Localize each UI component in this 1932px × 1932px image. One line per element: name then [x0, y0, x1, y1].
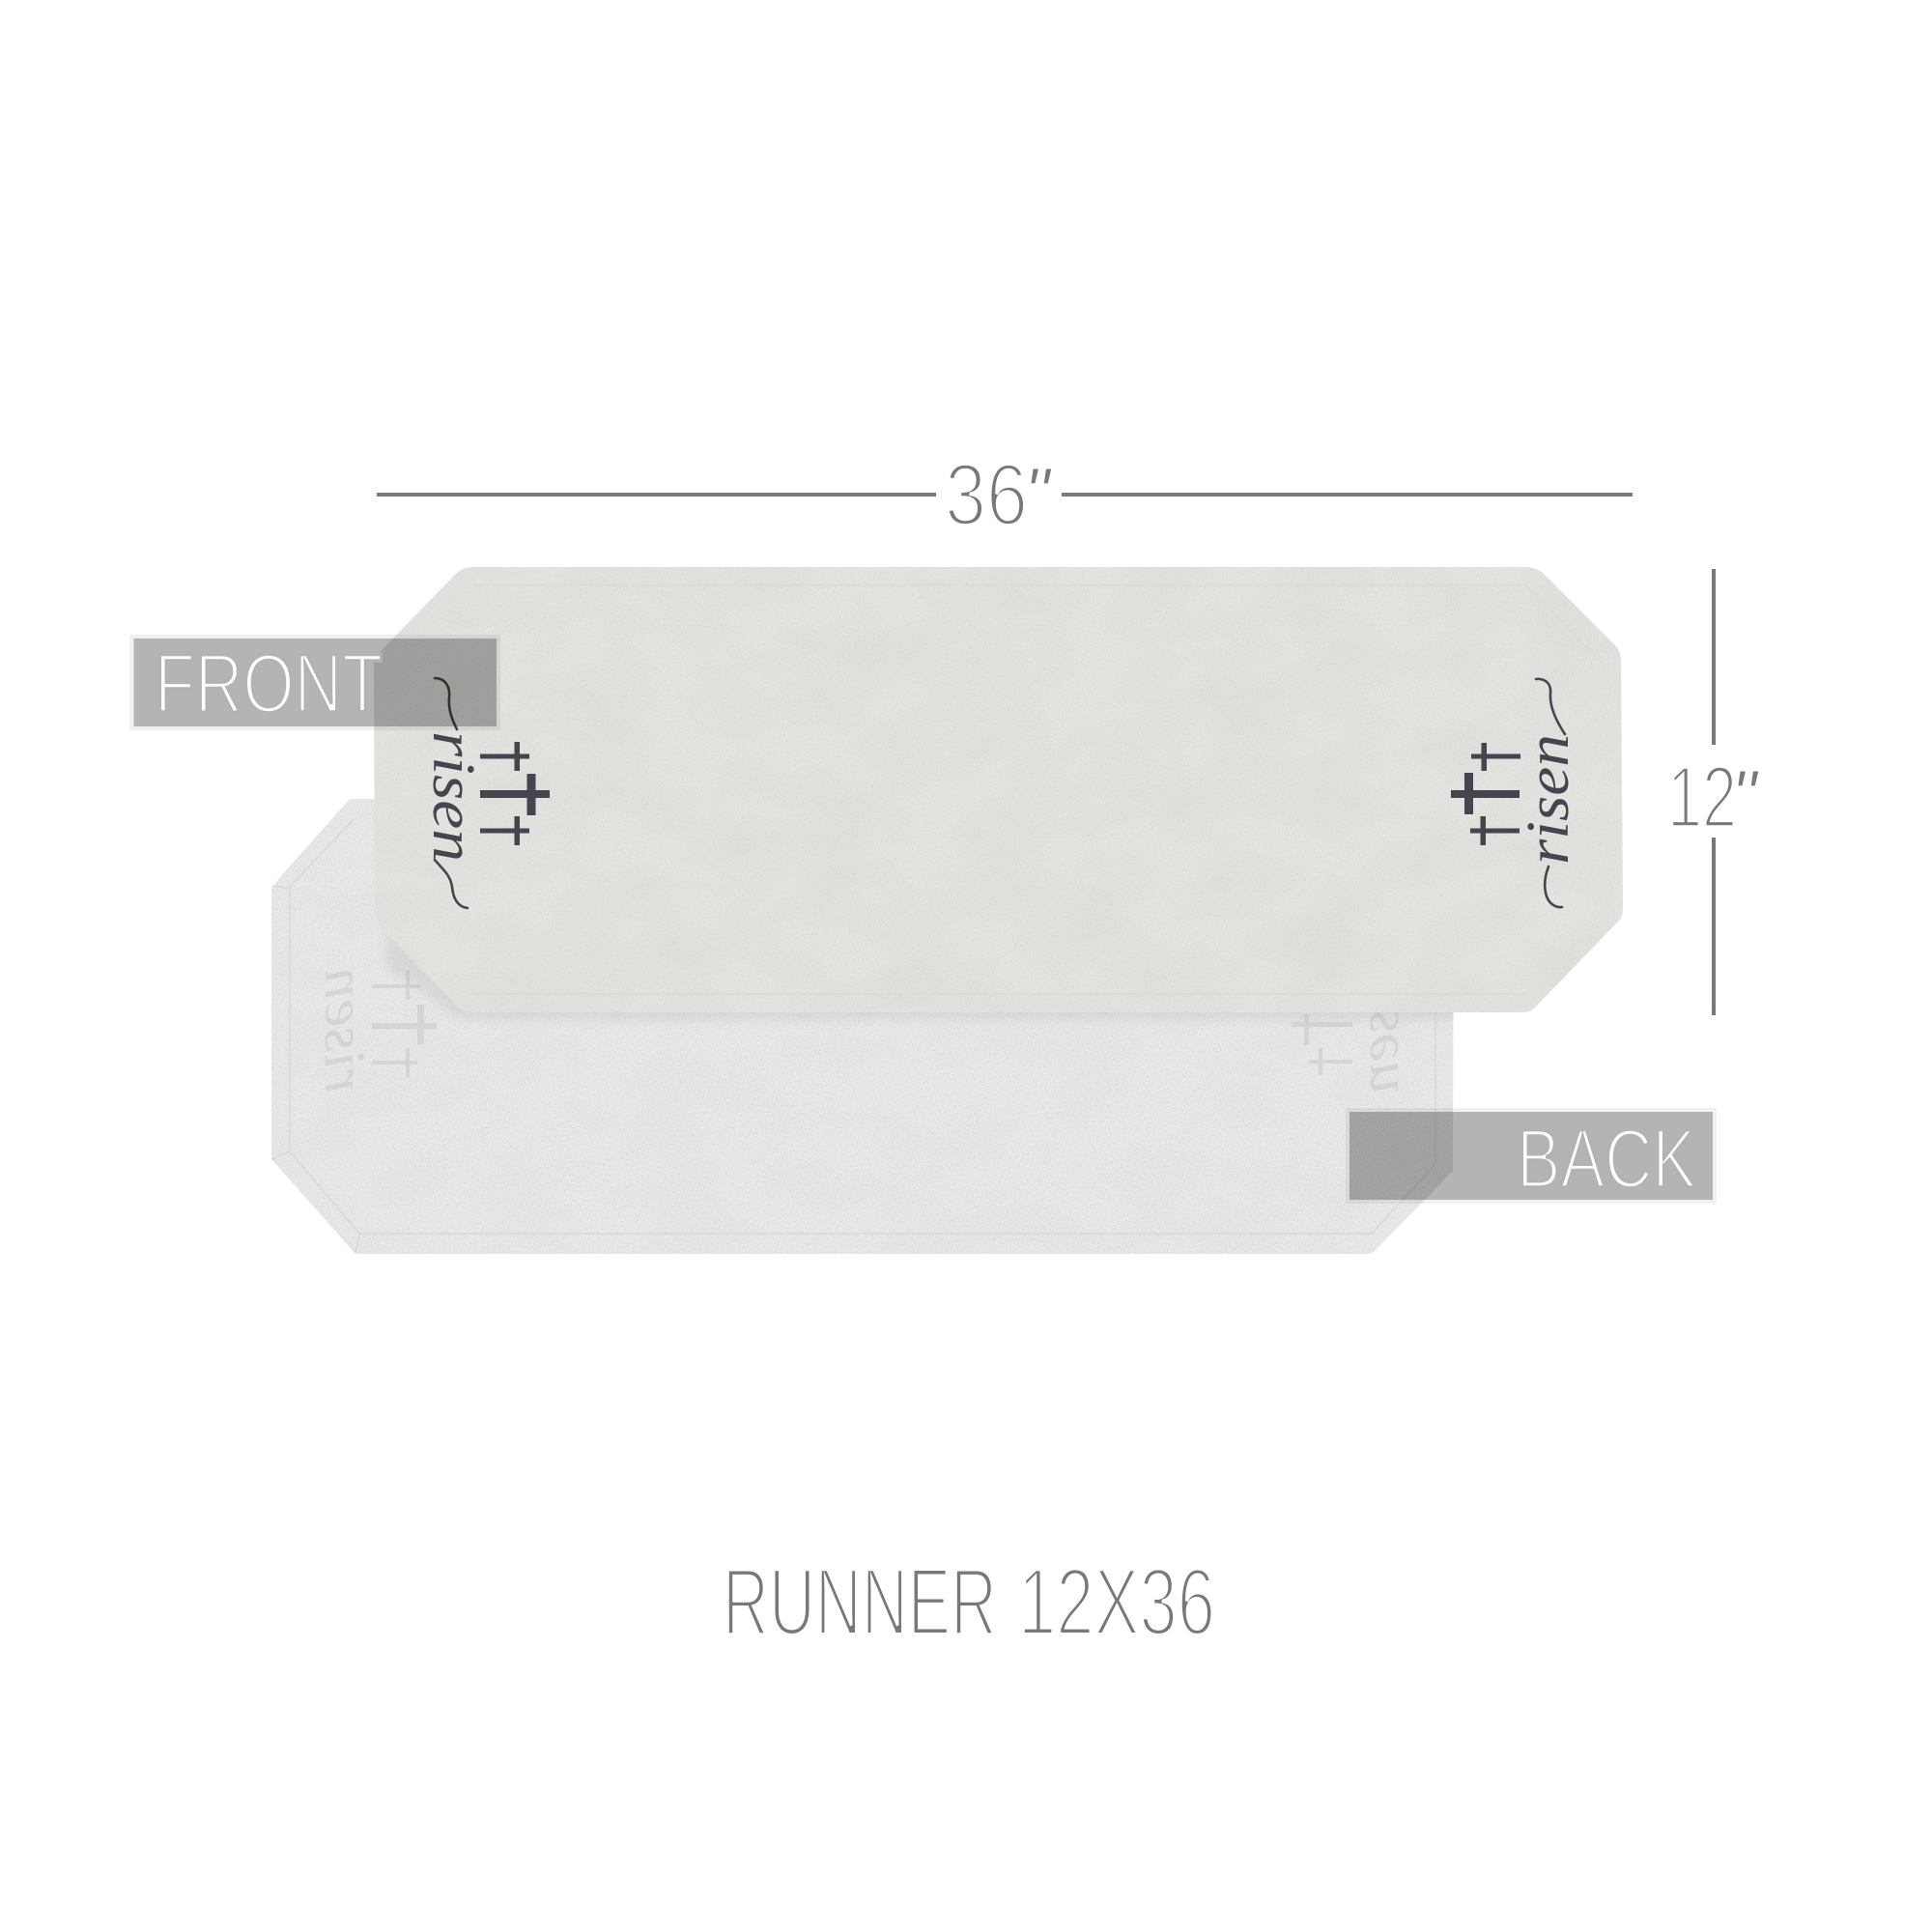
height dimension 12 inches: "	[1731, 755, 1760, 836]
print: right script word	[1516, 679, 1581, 907]
width dimension 36 inches: 36	[945, 447, 1028, 544]
print: right script word: risen	[1516, 734, 1581, 865]
height dimension 12 inches	[1667, 569, 1760, 1015]
print: left script word	[420, 678, 486, 908]
infographic canvas	[129, 466, 1758, 1634]
width dimension 36 inches: "	[1024, 453, 1053, 533]
ghost print: right mirrored crosses and script: risen	[1347, 966, 1410, 1094]
back hem stitching	[271, 819, 1435, 1253]
print: left script word: risen	[420, 731, 486, 862]
front runner soft shadow on back runner	[386, 935, 1453, 1020]
caption: RUNNER 12X36: 12X36	[1018, 1548, 1215, 1655]
panel: back runner	[271, 799, 1454, 1254]
front hem stitching	[473, 585, 1604, 994]
caption: RUNNER 12X36: RUNNER	[723, 1548, 997, 1655]
height dimension 12 inches: 12	[1667, 750, 1737, 846]
label: BACK	[1346, 1108, 1717, 1206]
ghost print: left mirrored crosses and script: risen	[313, 968, 377, 1094]
label: BACK: BACK	[1517, 1113, 1696, 1206]
ghost print: right mirrored crosses and script	[1292, 966, 1410, 1094]
panel: front runner	[374, 567, 1623, 1012]
print: right three crosses	[1451, 743, 1520, 845]
print: left three crosses	[480, 742, 550, 845]
label: FRONT: FRONT	[155, 638, 383, 730]
ghost print: left mirrored crosses and script	[313, 968, 437, 1094]
width dimension 36 inches	[377, 447, 1633, 544]
